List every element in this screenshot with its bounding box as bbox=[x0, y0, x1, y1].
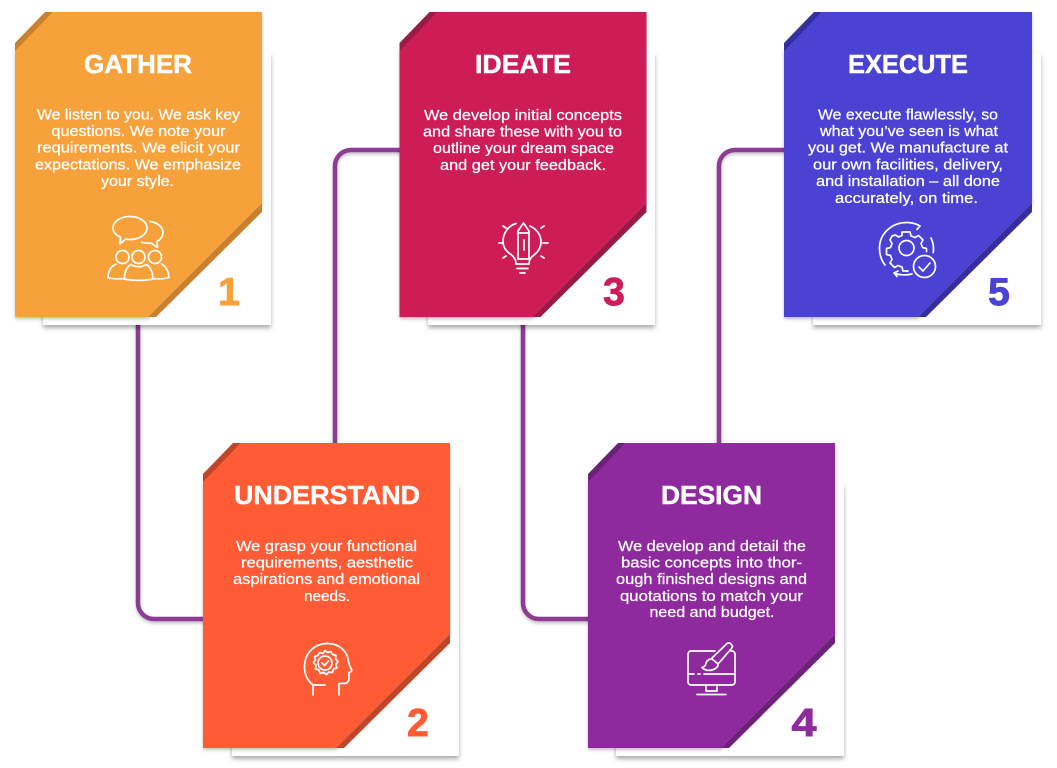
panel: design bbox=[588, 443, 844, 756]
text: execute description: accurately, on time. bbox=[835, 191, 978, 207]
text: design description: need and budget. bbox=[650, 605, 774, 621]
icon: gear cycle with check mark bbox=[880, 222, 936, 278]
text: understand description: We grasp your functional bbox=[236, 539, 417, 555]
text: execute description: and installation – all done bbox=[816, 174, 1000, 190]
heading: ideate: IDEATE bbox=[475, 49, 571, 79]
heading: gather: GATHER bbox=[84, 49, 192, 79]
text: ideate description: and share these with you to bbox=[423, 124, 622, 140]
text: design description bbox=[616, 539, 807, 621]
connector: design to execute bbox=[719, 150, 790, 450]
number 4: 4 bbox=[792, 702, 817, 745]
text: understand description: needs. bbox=[304, 589, 350, 605]
heading: design: DESIGN bbox=[661, 480, 762, 510]
heading: understand: UNDERSTAND bbox=[234, 480, 420, 510]
connector: ideate to design bbox=[523, 320, 595, 619]
icon: monitor with paint brush bbox=[688, 643, 735, 694]
text: execute description: our own facilities, delivery, bbox=[813, 158, 1003, 174]
text: execute description: We execute flawlessly, so bbox=[818, 108, 998, 124]
number 2: 2 bbox=[407, 702, 429, 745]
panel: ideate bbox=[400, 12, 655, 325]
text: execute description bbox=[808, 108, 1008, 207]
number 3: 3 bbox=[603, 271, 625, 314]
text: gather description: We listen to you. We ask key bbox=[37, 108, 241, 124]
text: execute description: what you’ve seen is what bbox=[819, 124, 998, 140]
text: understand description: requirements, aesthetic bbox=[241, 556, 413, 572]
text: design description: We develop and detail the bbox=[618, 539, 806, 555]
text: ideate description bbox=[423, 108, 622, 174]
text: gather description: requirements. We elicit your bbox=[37, 140, 240, 156]
text: design description: basic concepts into thor- bbox=[621, 556, 802, 572]
panel: gather bbox=[15, 12, 271, 325]
number 1: 1 bbox=[218, 271, 240, 314]
text: gather description: your style. bbox=[101, 174, 174, 190]
text: understand description: aspirations and emotional bbox=[233, 572, 420, 588]
connector: gather to understand bbox=[138, 320, 210, 619]
text: gather description: questions. We note your bbox=[52, 124, 226, 140]
number 5: 5 bbox=[988, 271, 1010, 314]
text: design description: ough finished designs and bbox=[616, 572, 807, 588]
icon: pencil in light bulb bbox=[499, 223, 548, 273]
text: gather description bbox=[35, 108, 241, 190]
text: execute description: you get. We manufacture at bbox=[808, 140, 1008, 156]
text: ideate description: outline your dream space bbox=[433, 141, 614, 157]
text: gather description: expectations. We emphasize bbox=[35, 158, 241, 174]
panel: understand bbox=[203, 443, 459, 756]
text: understand description bbox=[233, 539, 420, 605]
text: design description: quotations to match your bbox=[620, 589, 803, 605]
panel: execute bbox=[784, 12, 1041, 325]
heading: execute: EXECUTE bbox=[848, 49, 968, 79]
icon: group conversation bbox=[108, 216, 169, 280]
text: ideate description: and get your feedback. bbox=[440, 158, 606, 174]
connector: understand to ideate bbox=[335, 150, 405, 450]
text: ideate description: We develop initial concepts bbox=[424, 108, 622, 124]
icon: head with gear bbox=[304, 644, 352, 695]
